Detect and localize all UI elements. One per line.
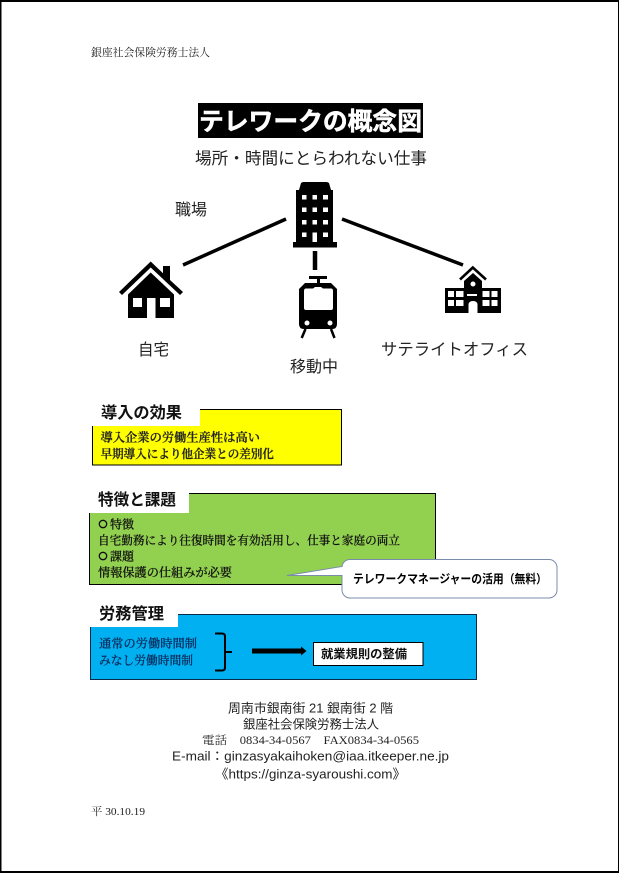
label: workplace: 職場 <box>175 201 207 219</box>
text: working time systems: 通常の労働時間制 <box>99 636 197 650</box>
text: benefits <box>100 430 274 461</box>
bracket <box>215 634 232 670</box>
connector lines <box>183 219 463 270</box>
callout: telework manager: テレワークマネージャーの活用（無料） <box>353 571 547 586</box>
label: on the move: 移動中 <box>290 358 338 376</box>
contact block: 銀座社会保険労務士法人 <box>243 716 379 732</box>
panel: labor management <box>86 604 476 680</box>
date: 平 30.10.19 <box>91 805 146 818</box>
contact block: 周南市銀南街 21 銀南街 2 階 <box>228 700 394 716</box>
arrow <box>252 646 306 656</box>
text: features and challenges: 情報保護の仕組みが必要 <box>98 564 232 580</box>
contact block: 電話 0834-34-0567 FAX0834-34-0565 <box>202 734 419 747</box>
callout: telework manager <box>287 559 557 598</box>
heading: features and challenges: 特徴と課題 <box>98 490 176 509</box>
box: work rules: 就業規則の整備 <box>321 646 407 661</box>
text: features and challenges: 自宅勤務により往復時間を有効活用し、仕事と家庭の両立 <box>98 532 400 548</box>
icon: satellite office <box>445 268 501 313</box>
box: work rules <box>314 642 423 666</box>
icon: train <box>299 276 337 338</box>
label: home: 自宅 <box>138 341 169 359</box>
heading: benefits: 導入の効果 <box>101 403 182 422</box>
header: company name: 銀座社会保険労務士法人 <box>91 45 210 59</box>
text: working time systems: みなし労働時間制 <box>99 652 193 668</box>
text: features and challenges <box>98 516 400 580</box>
contact block <box>172 700 449 782</box>
text: working time systems <box>99 636 197 668</box>
contact block: E-mail：ginzasyakaihoken@iaa.itkeeper.ne.jp <box>172 748 449 764</box>
panel: features and challenges <box>85 487 436 584</box>
label: satellite office: サテライトオフィス <box>381 341 528 359</box>
contact block: 《https://ginza-syaroushi.com》 <box>215 766 406 782</box>
text: features and challenges: 課題 <box>110 550 135 564</box>
icon: house <box>119 262 183 318</box>
title: テレワークの概念図 <box>199 108 422 136</box>
heading: labor management: 労務管理 <box>99 604 164 623</box>
subtitle: 場所・時間にとらわれない仕事 <box>195 149 427 168</box>
text: benefits: 導入企業の労働生産性は高い <box>100 430 260 444</box>
icon: office building <box>293 182 337 248</box>
text: benefits: 早期導入により他企業との差別化 <box>100 446 274 461</box>
panel: benefits of adoption <box>88 403 342 465</box>
text: features and challenges: 特徴 <box>110 516 134 532</box>
